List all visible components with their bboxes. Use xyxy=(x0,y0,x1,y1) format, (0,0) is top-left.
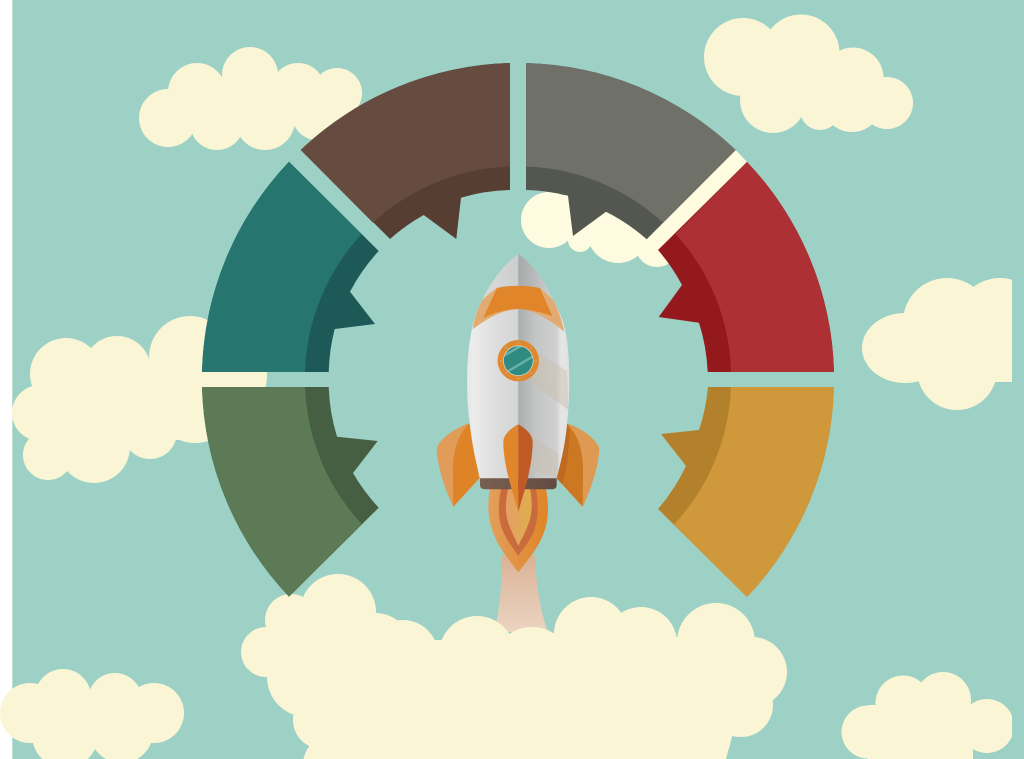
cloud: top left xyxy=(139,47,362,150)
cloud: behind grey segment xyxy=(521,150,747,267)
engine base xyxy=(480,478,557,489)
cloud: right clipped xyxy=(862,278,1012,410)
central fin xyxy=(503,424,533,512)
segment: yellow xyxy=(658,387,834,597)
segment: green xyxy=(202,387,379,597)
cloud: top right xyxy=(704,14,913,133)
rocket exhaust trail xyxy=(494,555,548,632)
left fin xyxy=(437,423,479,507)
body shadow stripes xyxy=(530,351,568,478)
orange nose band xyxy=(473,286,564,332)
cloud: bottom right xyxy=(842,672,1012,759)
porthole xyxy=(498,340,539,381)
segment: brown xyxy=(301,63,510,239)
cloud: large launch cloud xyxy=(241,574,787,759)
segment: red xyxy=(658,162,834,372)
cloud: bottom left xyxy=(0,669,184,759)
rocket body right half xyxy=(518,254,569,478)
right fin xyxy=(557,423,599,507)
rocket xyxy=(437,254,599,572)
rocket flame xyxy=(488,489,548,572)
nose cone xyxy=(482,254,553,300)
rocket body left half xyxy=(467,254,518,478)
cloud: left behind ring xyxy=(12,316,267,483)
segment: teal xyxy=(202,162,379,372)
segment: grey xyxy=(526,63,736,239)
